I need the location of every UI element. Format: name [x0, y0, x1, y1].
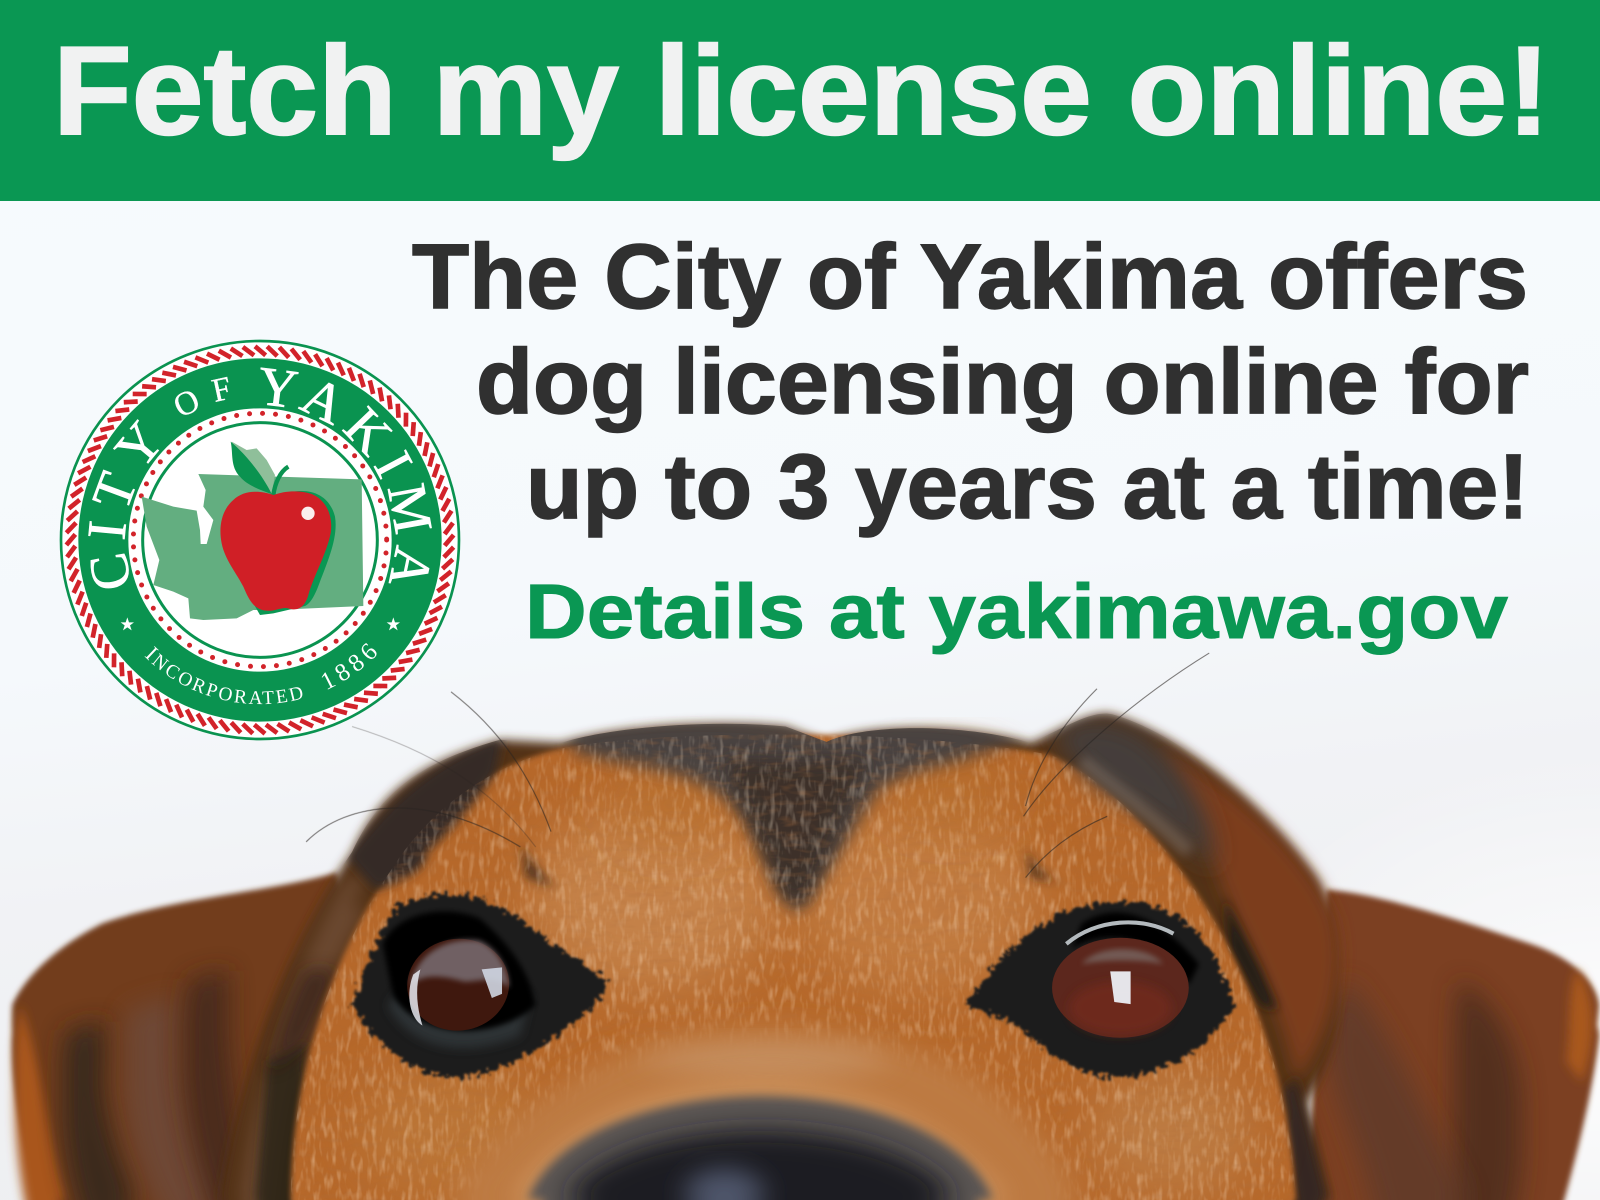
left eye — [352, 894, 607, 1078]
whiskers — [306, 653, 1209, 878]
right ear — [1306, 890, 1599, 1200]
head — [219, 713, 1339, 1200]
right eye — [964, 902, 1235, 1077]
apple — [220, 442, 336, 615]
seal lettering — [88, 367, 432, 704]
muzzle — [449, 1027, 1082, 1200]
seal lettering: OF — [175, 376, 228, 415]
seal: City of Yakima — [60, 340, 460, 740]
left head flap shading — [240, 878, 367, 1200]
main message: up to 3 years at a time! — [526, 436, 1529, 538]
photo: dog peeking over the edge — [12, 653, 1599, 1200]
left ear — [12, 872, 347, 1200]
nose — [528, 1096, 993, 1200]
details link: Details at yakimawa.gov — [525, 569, 1508, 655]
seal lettering: YAKIMA — [260, 367, 432, 584]
seal rings — [59, 339, 461, 741]
seal lettering: INCORPORATED — [144, 646, 302, 704]
header banner — [0, 0, 1600, 201]
fur texture — [286, 735, 1306, 1200]
right head flap — [1153, 745, 1339, 1082]
main message — [412, 226, 1529, 538]
main message: dog licensing online for — [476, 331, 1529, 433]
state of Washington — [142, 474, 363, 620]
main message: The City of Yakima offers — [412, 226, 1528, 328]
stars — [121, 617, 400, 630]
title: Fetch my license online! — [53, 20, 1550, 161]
dark forehead markings — [347, 718, 1214, 913]
face fur — [291, 734, 1296, 1200]
seal lettering: 1886 — [322, 643, 377, 690]
seal lettering: CITY — [88, 419, 160, 588]
